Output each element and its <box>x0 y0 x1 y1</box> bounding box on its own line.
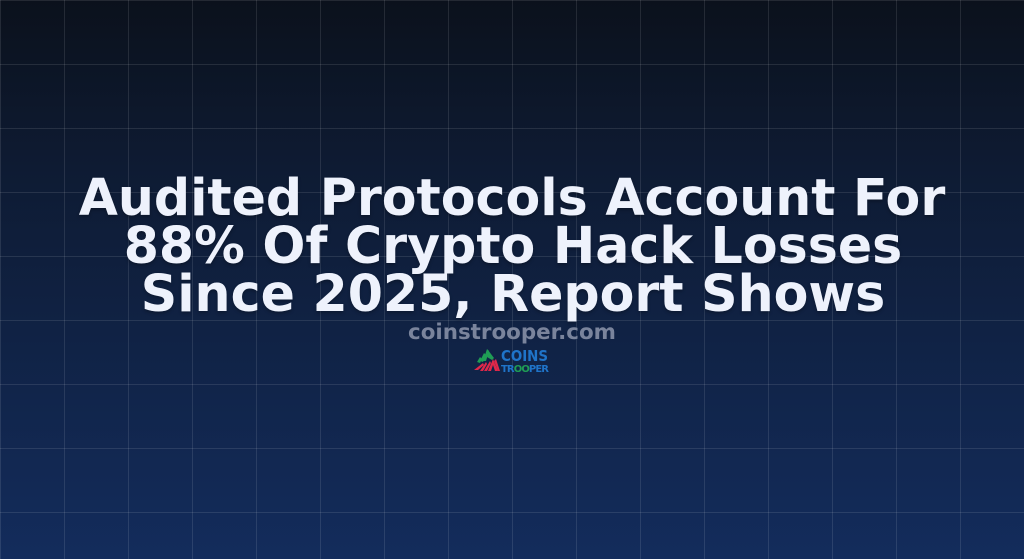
logo: Coins Trooper <box>474 347 549 374</box>
icon: green and red chart peaks <box>474 349 500 371</box>
title: 88% Of Crypto Hack Losses <box>124 216 902 275</box>
title <box>79 168 946 324</box>
title: Audited Protocols Account For <box>79 168 945 226</box>
title: Since 2025, Report Shows <box>141 264 885 323</box>
source website: coinstrooper.com <box>408 320 616 345</box>
